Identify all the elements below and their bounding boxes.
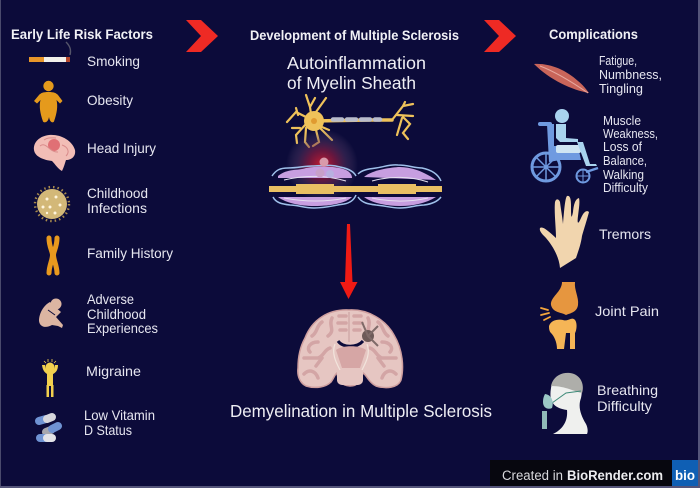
text: autoinflammation: [287, 53, 426, 93]
icon: cigarette: [29, 42, 71, 62]
label: low vitamin d status: D Status: [84, 422, 132, 438]
label: joint pain: Joint Pain: [595, 303, 659, 319]
label: muscle weakness etc: Muscle: [603, 114, 641, 128]
badge: created in biorender: [490, 460, 698, 486]
arrow: chevron left: [186, 20, 218, 52]
label: childhood infections: Infections: [87, 200, 147, 216]
icon: vitamin capsules: [39, 417, 58, 438]
arrow: chevron right: [484, 20, 516, 52]
label: tremors: Tremors: [599, 226, 651, 242]
label: adverse childhood experiences: Experiences: [87, 320, 158, 336]
label: adverse childhood experiences: [87, 291, 158, 336]
label: obesity: Obesity: [87, 92, 133, 108]
icon: head with oxygen mask: [542, 373, 588, 434]
label: fatigue numbness tingling: Tingling: [599, 82, 643, 96]
label: muscle weakness etc: Loss of: [603, 140, 642, 154]
panel: risk factors: [29, 42, 173, 438]
icon: muscle: [534, 64, 589, 93]
label: family history: Family History: [87, 245, 173, 261]
label: fatigue numbness tingling: [599, 54, 662, 96]
label: adverse childhood experiences: Childhood: [87, 306, 146, 322]
icon: virus: [35, 187, 69, 221]
badge: created in biorender: BioRender.com: [567, 468, 663, 483]
label: muscle weakness etc: Difficulty: [603, 181, 649, 195]
label: muscle weakness etc: [603, 114, 658, 195]
label: breathing difficulty: Breathing: [597, 382, 658, 398]
label: breathing difficulty: [597, 382, 658, 414]
heading: complications: Complications: [549, 27, 638, 42]
text: autoinflammation: Autoinflammation: [287, 53, 426, 73]
text: autoinflammation: of Myelin Sheath: [287, 73, 416, 93]
icon: coronal brain: [298, 310, 403, 388]
heading: development of multiple sclerosis: Development of Multiple Sclerosis: [250, 28, 459, 43]
label: muscle weakness etc: Balance,: [603, 154, 647, 168]
label: fatigue numbness tingling: Numbness,: [599, 68, 662, 82]
label: low vitamin d status: Low Vitamin: [84, 407, 155, 423]
icon: knee joint: [541, 282, 578, 349]
icon: inflammation glow: [286, 129, 358, 201]
icon: myelin sheath: [269, 158, 442, 208]
icon: wheelchair: [532, 109, 598, 182]
icon: neuron: [287, 95, 413, 147]
label: muscle weakness etc: Weakness,: [603, 127, 658, 141]
label: adverse childhood experiences: Adverse: [87, 291, 134, 307]
icon: curled child: [39, 298, 63, 328]
badge: created in biorender: bio: [675, 468, 695, 483]
panel: complications: [532, 54, 662, 434]
arrow: down: [340, 224, 358, 299]
label: muscle weakness etc: Walking: [603, 168, 644, 182]
badge: created in biorender: Created in: [502, 468, 563, 483]
text: demyelination: Demyelination in Multiple Sclerosis: [230, 401, 492, 421]
label: breathing difficulty: Difficulty: [597, 398, 652, 414]
icon: hand: [540, 196, 589, 268]
label: childhood infections: [87, 185, 148, 216]
icon: chromosome: [49, 238, 57, 273]
panel: development: [230, 53, 492, 421]
label: migraine: Migraine: [86, 363, 141, 379]
label: low vitamin d status: [84, 407, 155, 438]
icon: brain with injury: [34, 135, 75, 171]
label: smoking: Smoking: [87, 53, 140, 69]
icon: obesity figure: [34, 81, 62, 122]
heading: early life risk factors: Early Life Risk Factors: [11, 27, 153, 42]
label: head injury: Head Injury: [87, 140, 156, 156]
label: childhood infections: Childhood: [87, 185, 148, 201]
label: fatigue numbness tingling: Fatigue,: [599, 54, 637, 68]
icon: migraine figure: [42, 359, 58, 397]
